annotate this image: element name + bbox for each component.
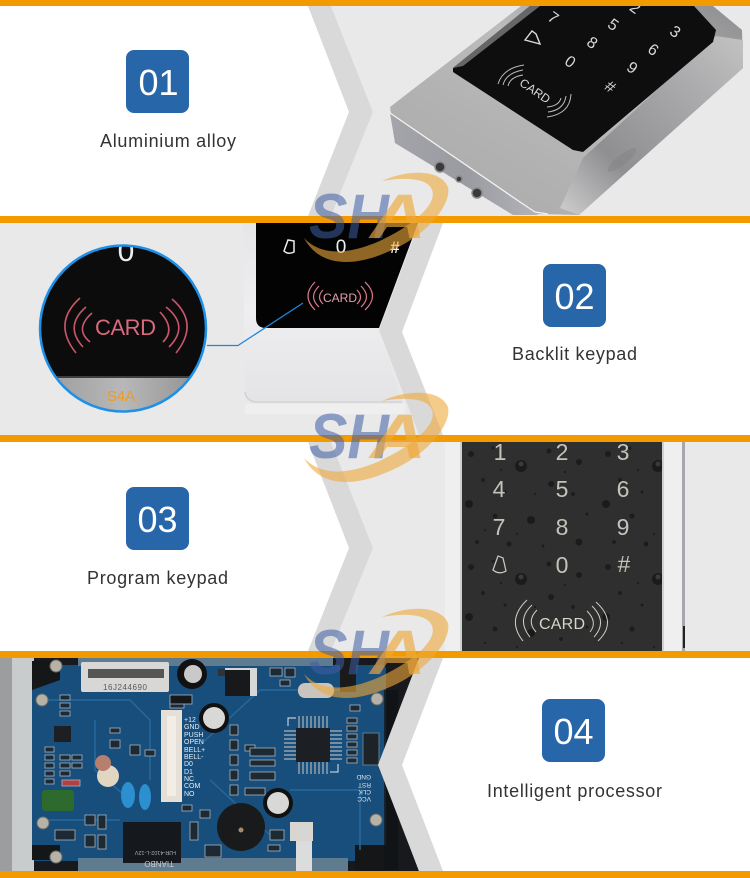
device photo: keypad with water drops: [445, 439, 685, 651]
programming pin labels: CLK: [358, 788, 371, 795]
magnifier circle callout: [39, 235, 207, 414]
badge 04: [542, 699, 605, 762]
mounting screws: [36, 660, 383, 863]
chevron section 4: [378, 658, 443, 871]
device keypad glass: 0: [561, 53, 578, 72]
watermark logo 1: A: [368, 182, 426, 252]
badge 01: [126, 50, 189, 113]
device photo: upright reader: [243, 223, 418, 414]
panel background section 1: [331, 6, 750, 216]
CARD text: CARD: [539, 616, 585, 633]
keypad glyphs: #: [390, 238, 400, 257]
magnifier circle callout: 0: [118, 235, 134, 268]
device keypad glass: 9: [623, 59, 640, 78]
label: Program keypad: Program keypad: [87, 568, 228, 588]
device keypad glass: #: [601, 78, 618, 97]
device keypad glass: [453, 0, 716, 152]
terminal labels: NO: [184, 791, 195, 798]
device keypad glass: 6: [644, 41, 661, 60]
relay: [123, 822, 181, 868]
keypad digits: 6: [617, 476, 629, 502]
keypad digits: 1: [494, 439, 506, 465]
watermark logo 2: A: [368, 402, 426, 472]
keypad digits: #: [618, 551, 631, 577]
programming pin labels: GND: [356, 773, 371, 780]
label: Backlit keypad: Backlit keypad: [512, 344, 637, 364]
terminal labels: GND: [184, 724, 200, 731]
watermark logo 3: A: [368, 618, 426, 688]
device keypad glass: 8: [583, 34, 600, 53]
watermark logo 2: [304, 393, 448, 482]
barcode label: [81, 662, 169, 692]
icon: angled contactless waves: [498, 65, 571, 117]
terminal labels: +12: [184, 717, 196, 724]
black jumper block: [340, 660, 356, 692]
small surface-mount parts: [45, 668, 360, 857]
chevron section 3: [308, 442, 373, 651]
icon: contactless waves: [515, 600, 608, 641]
panel background section 2: [0, 223, 419, 435]
keypad digits: [493, 439, 631, 578]
keypad digits: 8: [556, 514, 568, 540]
panel background section 3: [331, 442, 750, 651]
label: Aluminium alloy: Aluminium alloy: [100, 131, 236, 151]
power transistor: [218, 668, 257, 696]
terminal labels: D1: [184, 769, 193, 776]
terminal labels: OPEN: [184, 739, 204, 746]
programming pin labels: [356, 773, 371, 802]
watermark logo 1: SH: [309, 182, 390, 252]
ribbon cable: [290, 822, 313, 871]
device keypad glass: 5: [604, 16, 621, 35]
terminal labels: COM: [184, 783, 200, 790]
relay: HJR-4102-L-12V: [134, 849, 176, 855]
watermark logo 3: SH: [309, 618, 390, 688]
badge 02: 02: [554, 276, 595, 317]
device photo: angled aluminium reader: [390, 0, 743, 215]
terminal labels: NC: [184, 776, 194, 783]
processor chip: [284, 716, 342, 774]
keypad digits: 5: [556, 476, 568, 502]
watermark logo 1: [304, 173, 448, 262]
photoresistor: [95, 755, 119, 787]
icon: small contactless waves: [308, 282, 372, 310]
keypad digits: 3: [617, 439, 629, 465]
white wire connector: [161, 710, 182, 802]
magnifier circle callout: S4A: [107, 388, 135, 405]
keypad glyphs: 0: [336, 237, 346, 258]
magnifier circle callout: CARD: [95, 315, 156, 340]
keypad digits: 4: [493, 476, 506, 502]
icon: large contactless waves: [65, 298, 187, 353]
icon: bell: [493, 556, 506, 573]
panel: section 2 backlit keypad: [0, 223, 637, 435]
callout leader line: [207, 303, 303, 346]
panel: section 1 aluminium alloy: [100, 0, 750, 216]
badge 02: [543, 264, 606, 327]
capacitors: [177, 659, 293, 818]
crystal: [298, 683, 334, 698]
badge 03: [126, 487, 189, 550]
terminal labels: BELL-: [184, 754, 204, 761]
keypad digits: 9: [617, 514, 629, 540]
badge 03: 03: [137, 499, 178, 540]
circuit board photo: [0, 658, 419, 871]
device keypad glass: 7: [544, 9, 561, 28]
terminal labels: PUSH: [184, 732, 203, 739]
keypad digits: 2: [556, 439, 568, 465]
chevron section 2: [379, 223, 443, 435]
programming pin labels: VCC: [357, 795, 371, 802]
right dark cable area: [384, 690, 398, 870]
keypad glyphs: [336, 237, 400, 258]
board silk traces: [38, 690, 360, 850]
barcode label: 16J244690: [103, 683, 148, 692]
eight-pin chip: [54, 726, 71, 742]
icon: bell on angled keypad: [525, 31, 540, 44]
chevron section 1: [308, 6, 373, 216]
terminal labels: D0: [184, 761, 193, 768]
pin header: [363, 733, 379, 765]
watermark logo 2: SH: [309, 402, 390, 472]
keypad digits: 0: [556, 552, 568, 578]
device screw holes: [435, 162, 482, 198]
green capacitor: [42, 790, 74, 811]
programming pin labels: RST: [358, 781, 371, 788]
device keypad glass: 3: [666, 23, 683, 42]
small CARD text: CARD: [323, 291, 357, 305]
watermark logo 3: [304, 609, 448, 698]
buzzer: [217, 803, 265, 851]
terminal labels: [184, 717, 205, 798]
panel: section 4 intelligent processor: [0, 658, 662, 871]
icon: bell: [284, 240, 294, 253]
device keypad glass: CARD: [517, 76, 553, 106]
relay: TIANBO: [144, 859, 174, 868]
label: Intelligent processor: Intelligent processor: [487, 781, 662, 801]
blue capacitors: [121, 782, 151, 810]
terminal labels: BELL+: [184, 747, 205, 754]
keypad digits: 7: [493, 514, 505, 540]
panel: section 3 program keypad: [87, 439, 750, 651]
badge 04: 04: [553, 711, 594, 752]
badge 01: 01: [138, 62, 179, 103]
